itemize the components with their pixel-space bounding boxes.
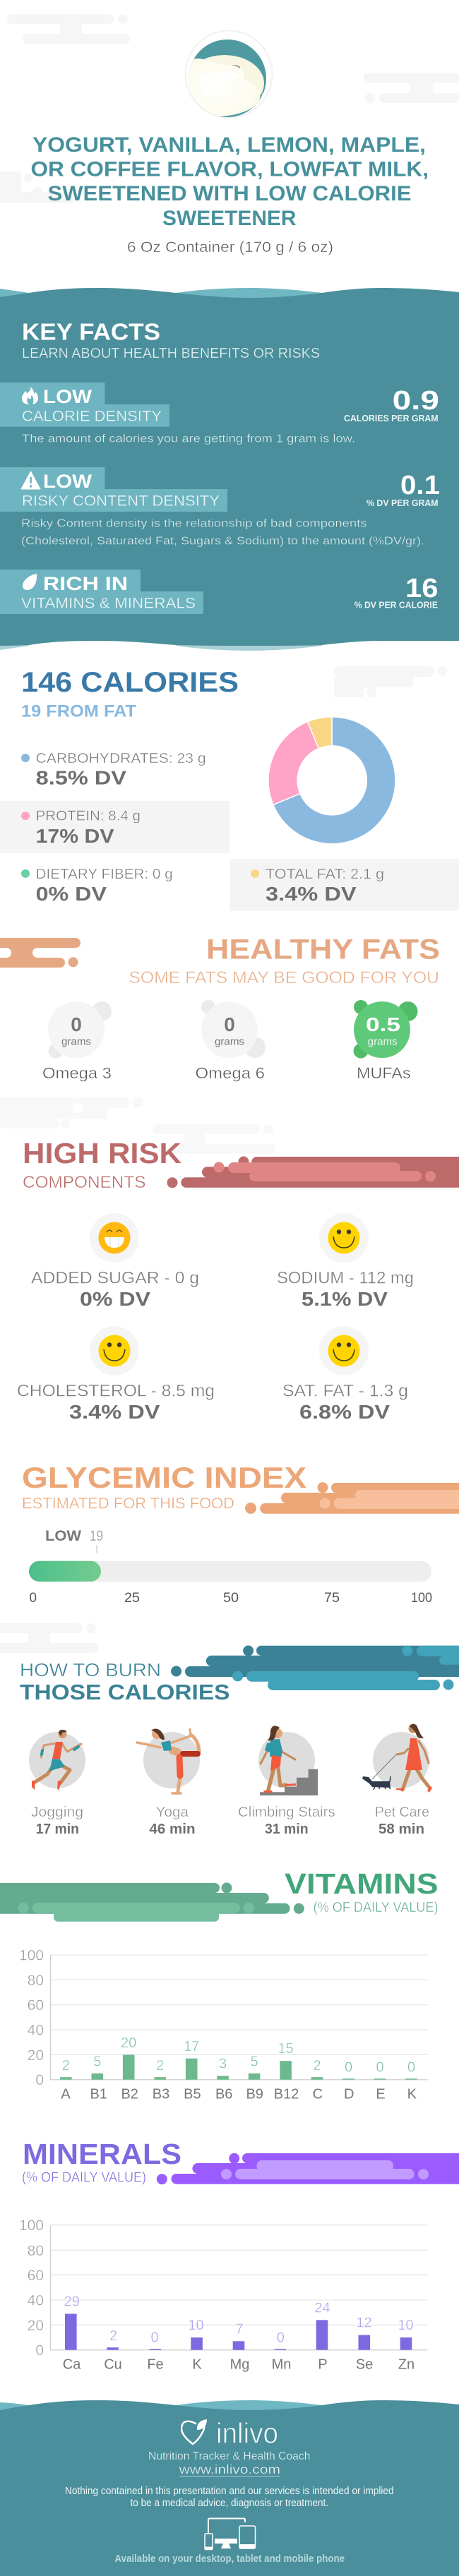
bar chart: minerals: 20 xyxy=(28,2318,44,2334)
bar chart: vitamins: 17 xyxy=(184,2039,199,2054)
item: saturated fat: SAT. FAT - 1.3 g xyxy=(282,1381,408,1400)
bar chart: vitamins: 2 xyxy=(62,2058,70,2074)
description xyxy=(21,518,424,548)
value: 0.1: 0.1 xyxy=(400,471,440,500)
label: low: LOW xyxy=(43,471,93,492)
bar chart: minerals: Mg xyxy=(230,2357,249,2373)
title: SWEETENED WITH LOW CALORIE xyxy=(48,182,411,205)
activity: yoga: 46 min xyxy=(149,1822,195,1837)
bar chart: vitamins: B2 xyxy=(121,2086,138,2102)
panel: high risk components xyxy=(17,1137,459,1423)
unit: % DV PER GRAM xyxy=(366,498,439,508)
value: 0.9: 0.9 xyxy=(393,386,439,416)
panel: key facts xyxy=(0,288,459,651)
label: risky content density: RISKY CONTENT DENSITY xyxy=(22,493,220,510)
legend: carbohydrates xyxy=(21,751,206,789)
item: sodium xyxy=(277,1213,414,1310)
subheading: 19 from fat: 19 FROM FAT xyxy=(21,702,136,721)
subheading: components: COMPONENTS xyxy=(23,1173,145,1192)
omega 6: 0 xyxy=(224,1013,235,1035)
heading: healthy fats: HEALTHY FATS xyxy=(206,934,440,965)
subheading: (% OF DAILY VALUE) xyxy=(314,1900,439,1915)
panel: glycemic index xyxy=(22,1461,459,1606)
subheading: SOME FATS MAY BE GOOD FOR YOU xyxy=(129,968,439,987)
subheading: LEARN ABOUT HEALTH BENEFITS OR RISKS xyxy=(22,346,320,361)
bar chart: minerals: 12 xyxy=(356,2316,372,2331)
bar chart: vitamins: B9 xyxy=(246,2086,263,2102)
bar chart: vitamins: B5 xyxy=(184,2086,201,2102)
bar chart: minerals: 10 xyxy=(398,2318,414,2333)
bar chart: minerals: K xyxy=(192,2357,202,2373)
bar chart: minerals: Se xyxy=(356,2357,373,2373)
marker label: LOW xyxy=(45,1528,81,1544)
omega 3: Omega 3 xyxy=(42,1064,112,1082)
wordmark: inlivo xyxy=(216,2417,278,2450)
bar chart: minerals: 10 xyxy=(188,2318,204,2333)
activity: climbing stairs: 31 min xyxy=(265,1822,309,1837)
decoration: teal stripes xyxy=(171,1646,459,1690)
activity: jogging: Jogging xyxy=(31,1805,83,1820)
heading: those calories: THOSE CALORIES xyxy=(20,1680,230,1704)
bar chart: vitamins: K xyxy=(407,2086,417,2102)
serving size subtitle: 6 Oz Container (170 g / 6 oz) xyxy=(127,239,333,255)
availability note: Available on your desktop, tablet and mobile phone xyxy=(114,2553,345,2565)
item: added sugar: 0% DV xyxy=(80,1288,150,1310)
bar chart: minerals: 0 xyxy=(35,2342,44,2359)
bar chart: vitamins: 3 xyxy=(219,2057,227,2072)
icon: heart with leaf xyxy=(181,2419,207,2444)
panel: calories xyxy=(0,666,459,911)
marker label: 19 xyxy=(90,1528,103,1544)
bar chart: vitamins: D xyxy=(344,2086,354,2102)
item: saturated fat: 6.8% DV xyxy=(299,1401,390,1423)
bar chart: minerals: P xyxy=(318,2357,328,2373)
item: cholesterol: CHOLESTEROL - 8.5 mg xyxy=(17,1381,215,1400)
bar chart: minerals: Mn xyxy=(272,2357,291,2373)
activity: yoga xyxy=(137,1729,200,1837)
legend: protein xyxy=(0,801,230,853)
item: sodium: SODIUM - 112 mg xyxy=(277,1268,414,1287)
bar chart: vitamins: B3 xyxy=(153,2086,169,2102)
subheading: ESTIMATED FOR THIS FOOD xyxy=(22,1495,234,1512)
title: SWEETENER xyxy=(162,207,297,230)
bar chart: vitamins: 0 xyxy=(345,2060,352,2076)
decoration: purple stripes xyxy=(157,2153,459,2184)
decoration: orange stripes xyxy=(0,938,81,968)
website link: www.inlivo.com xyxy=(179,2462,280,2476)
bar chart: minerals: 7 xyxy=(235,2322,244,2337)
bar chart: minerals: 60 xyxy=(28,2268,44,2284)
icon: warning triangle xyxy=(21,471,40,489)
background cloud xyxy=(0,1623,98,1653)
bar chart: vitamins: 0 xyxy=(376,2060,384,2076)
panel: minerals xyxy=(19,2138,459,2373)
heading: minerals: MINERALS xyxy=(23,2138,181,2170)
bar chart: minerals: 2 xyxy=(109,2328,117,2344)
header background clouds xyxy=(0,14,459,203)
activity: pet care: 58 min xyxy=(378,1822,424,1837)
bar chart: vitamins: 15 xyxy=(278,2041,294,2057)
title: OR COFFEE FLAVOR, LOWFAT MILK, xyxy=(31,158,429,181)
unit: CALORIES PER GRAM xyxy=(344,413,439,423)
background cloud xyxy=(334,666,447,697)
bar chart: vitamins: 0 xyxy=(35,2072,44,2088)
legend: dietary fiber: DIETARY FIBER: 0 g xyxy=(36,867,173,882)
tagline: Nutrition Tracker & Health Coach xyxy=(148,2450,311,2462)
description: Risky Content density is the relationship of bad components xyxy=(21,518,367,530)
bar chart: vitamins: 100 xyxy=(19,1948,44,1963)
label: rich in: RICH IN xyxy=(43,573,128,594)
bar chart: minerals: 100 xyxy=(19,2217,44,2234)
gauge scale: 75 xyxy=(324,1591,340,1606)
activity: jogging: 17 min xyxy=(36,1822,79,1837)
legend: carbohydrates: CARBOHYDRATES: 23 g xyxy=(36,751,206,766)
logo: inlivo xyxy=(181,2417,278,2450)
bar chart: vitamins: 80 xyxy=(28,1973,44,1989)
bar chart: vitamins: B6 xyxy=(215,2086,232,2102)
item: added sugar xyxy=(31,1213,199,1310)
bar chart: vitamins: 40 xyxy=(28,2023,44,2038)
activity: climbing stairs: Climbing Stairs xyxy=(238,1805,335,1820)
heading: 146 calories: 146 CALORIES xyxy=(21,667,239,698)
description: The amount of calories you are getting from 1 gram is low. xyxy=(22,433,355,445)
label: vitamins and minerals: VITAMINS & MINERALS xyxy=(21,596,196,612)
heading: glycemic index: GLYCEMIC INDEX xyxy=(22,1461,306,1494)
disclaimer xyxy=(65,2486,394,2509)
omega 6: Omega 6 xyxy=(195,1064,265,1082)
panel: healthy fats xyxy=(0,934,440,1082)
decoration: orange stripes xyxy=(245,1482,459,1514)
activity: pet care xyxy=(362,1723,432,1837)
bar chart: minerals: 29 xyxy=(64,2294,80,2309)
fact: rich in vitamins and minerals xyxy=(0,570,439,614)
icon: leaf xyxy=(23,574,37,590)
marker label xyxy=(45,1528,103,1553)
bar chart: vitamins: 5 xyxy=(251,2054,258,2069)
icon: dog xyxy=(362,1776,391,1790)
bar chart: minerals: 40 xyxy=(28,2292,44,2309)
label: calorie density: CALORIE DENSITY xyxy=(22,409,162,425)
icon: flame xyxy=(22,387,38,404)
mufas xyxy=(353,1000,418,1082)
panel: footer xyxy=(0,2400,459,2576)
legend: protein: 17% DV xyxy=(36,825,114,847)
title: YOGURT, VANILLA, LEMON, MAPLE, xyxy=(32,133,426,157)
bar chart: vitamins: 0 xyxy=(407,2060,415,2076)
item: saturated fat xyxy=(282,1326,408,1423)
background clouds between sections xyxy=(0,1097,275,1154)
bar chart: vitamins: E xyxy=(376,2086,386,2102)
value: 16: 16 xyxy=(405,574,439,603)
heading: key facts: KEY FACTS xyxy=(22,319,160,345)
mufas: 0.5 xyxy=(366,1013,400,1035)
mufas: grams xyxy=(368,1036,398,1048)
bar chart: vitamins: 60 xyxy=(28,1997,44,2014)
gauge scale: 50 xyxy=(223,1591,239,1606)
label: low: LOW xyxy=(43,386,93,407)
description: (Cholesterol, Saturated Fat, Sugars & Sodium) to the amount (%DV/gr). xyxy=(21,536,424,548)
bar chart: vitamins: B1 xyxy=(90,2086,107,2102)
food photo: bowl of yogurt xyxy=(185,31,273,120)
omega 3 xyxy=(42,1001,112,1082)
mufas: MUFAs xyxy=(357,1064,411,1082)
activity: jogging xyxy=(29,1730,85,1837)
gauge bar xyxy=(29,1561,431,1582)
subheading: (% OF DAILY VALUE) xyxy=(22,2170,146,2186)
unit: % DV PER CALORIE xyxy=(354,600,438,610)
disclaimer: to be a medical advice, diagnosis or treatment. xyxy=(130,2498,328,2509)
bar chart: vitamins: 2 xyxy=(156,2058,164,2074)
item: sodium: 5.1% DV xyxy=(302,1288,388,1310)
legend: total fat: 3.4% DV xyxy=(266,883,357,905)
bar chart: minerals: 80 xyxy=(28,2243,44,2259)
bar chart: vitamins: B12 xyxy=(274,2086,299,2102)
bar chart: vitamins: 2 xyxy=(313,2058,321,2074)
omega 6: grams xyxy=(215,1036,244,1048)
omega 6 xyxy=(195,1000,266,1082)
activity: climbing stairs xyxy=(238,1726,335,1837)
heading: vitamins: VITAMINS xyxy=(285,1867,439,1900)
bar chart: vitamins xyxy=(19,1948,427,2102)
gauge scale: 0 xyxy=(30,1591,37,1606)
heading: how to burn: HOW TO BURN xyxy=(20,1661,161,1680)
panel: how to burn those calories xyxy=(0,1623,459,1837)
panel: vitamins xyxy=(0,1867,439,2102)
bar chart: minerals: 0 xyxy=(277,2330,285,2345)
bar chart: vitamins: 20 xyxy=(121,2035,136,2051)
gauge scale: 100 xyxy=(411,1591,432,1606)
title xyxy=(31,133,429,230)
disclaimer: Nothing contained in this presentation and our services is intended or implied xyxy=(65,2486,394,2497)
omega 3: 0 xyxy=(71,1013,82,1035)
legend: carbohydrates: 8.5% DV xyxy=(36,767,126,789)
item: cholesterol xyxy=(17,1326,215,1423)
legend: total fat: TOTAL FAT: 2.1 g xyxy=(266,867,384,882)
decoration: green stripes xyxy=(0,1883,304,1922)
bar chart: minerals: Ca xyxy=(63,2357,81,2373)
bar chart: vitamins: 5 xyxy=(93,2054,101,2069)
bar chart: minerals: Fe xyxy=(147,2357,164,2373)
bar chart: minerals: Cu xyxy=(104,2357,122,2373)
item: added sugar: ADDED SUGAR - 0 g xyxy=(31,1268,199,1287)
item: cholesterol: 3.4% DV xyxy=(69,1401,160,1423)
omega 3: grams xyxy=(61,1036,91,1048)
gauge scale xyxy=(30,1591,432,1606)
donut chart xyxy=(268,717,395,844)
legend: dietary fiber xyxy=(21,867,173,905)
legend: total fat xyxy=(230,859,459,911)
decoration: red stripes xyxy=(167,1156,459,1188)
bar chart: vitamins: 20 xyxy=(28,2047,44,2064)
fact: low calorie density xyxy=(0,383,439,445)
bar chart: minerals: Zn xyxy=(398,2357,415,2373)
bar chart: minerals: 0 xyxy=(150,2330,159,2345)
legend: protein: PROTEIN: 8.4 g xyxy=(36,809,141,824)
activity: pet care: Pet Care xyxy=(375,1805,429,1820)
bar chart: vitamins: A xyxy=(61,2086,71,2102)
fact: low risky content density xyxy=(0,467,440,548)
bar chart: minerals: 24 xyxy=(314,2301,330,2316)
legend: dietary fiber: 0% DV xyxy=(36,883,107,905)
bar chart: minerals xyxy=(19,2217,427,2373)
heading: high risk: HIGH RISK xyxy=(23,1137,181,1169)
activity: yoga: Yoga xyxy=(156,1805,189,1820)
bar chart: vitamins: C xyxy=(313,2086,323,2102)
gauge scale: 25 xyxy=(124,1591,140,1606)
icon: devices xyxy=(205,2518,256,2549)
